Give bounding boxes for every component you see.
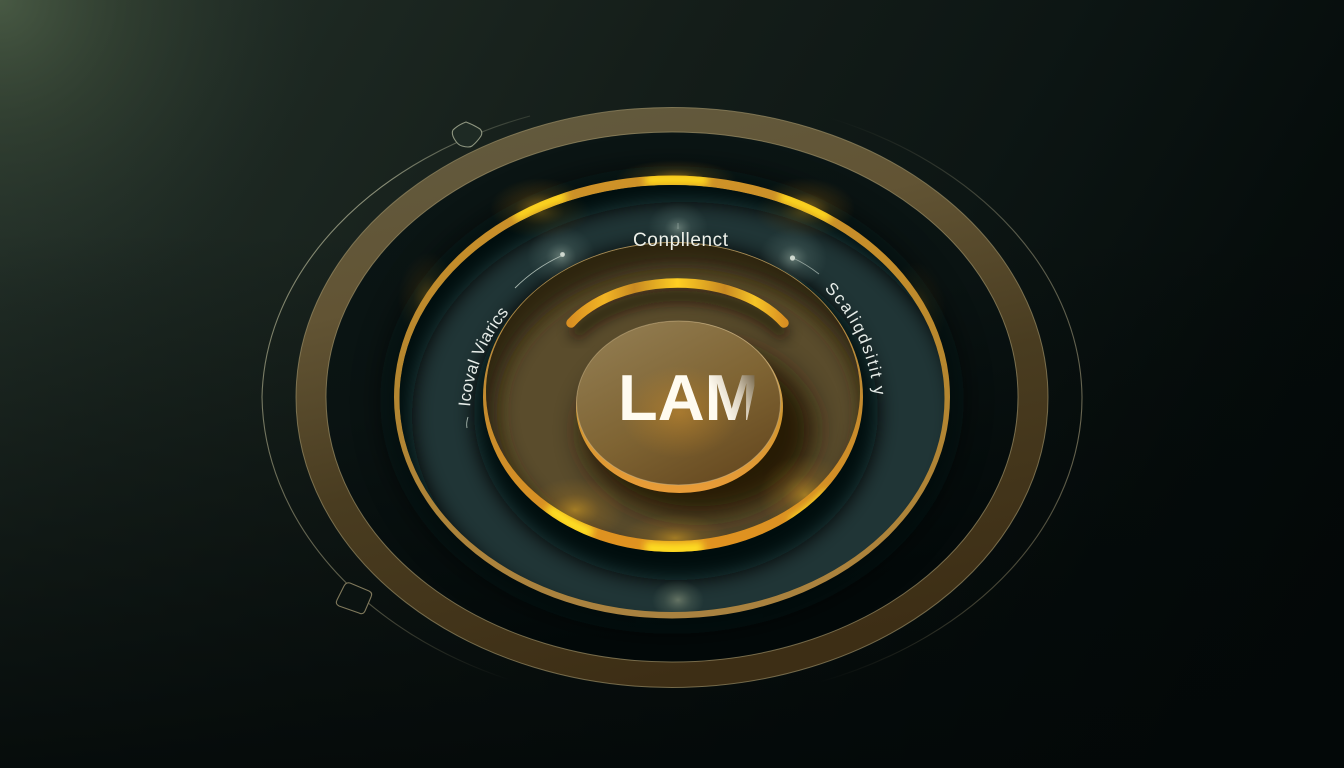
label: right: Scaliqdsitit y bbox=[826, 283, 884, 394]
disc gold rim bbox=[483, 242, 863, 552]
central LAM disc bbox=[576, 321, 783, 493]
outer gold ring bbox=[296, 108, 1048, 688]
title: LAM: LAM bbox=[618, 361, 759, 434]
panel: inner olive disc bbox=[483, 242, 863, 552]
teal glow spots bbox=[527, 202, 827, 288]
rim hot spots bbox=[515, 179, 830, 218]
label: left: Icoval Viarics bbox=[458, 308, 508, 406]
shadow around the teal disc bbox=[380, 166, 964, 634]
icon: orbit node top-left bbox=[452, 122, 482, 147]
inner glowing arc bbox=[571, 283, 786, 336]
icon: orbit node bottom-left bbox=[336, 583, 372, 614]
label: top: Conpllenct bbox=[633, 230, 729, 251]
thin outer orbit arcs bbox=[262, 116, 1082, 682]
marker lines and dots bbox=[467, 223, 819, 428]
rim glows bbox=[398, 160, 946, 358]
panel: teal ring with gold rim bbox=[394, 162, 950, 618]
